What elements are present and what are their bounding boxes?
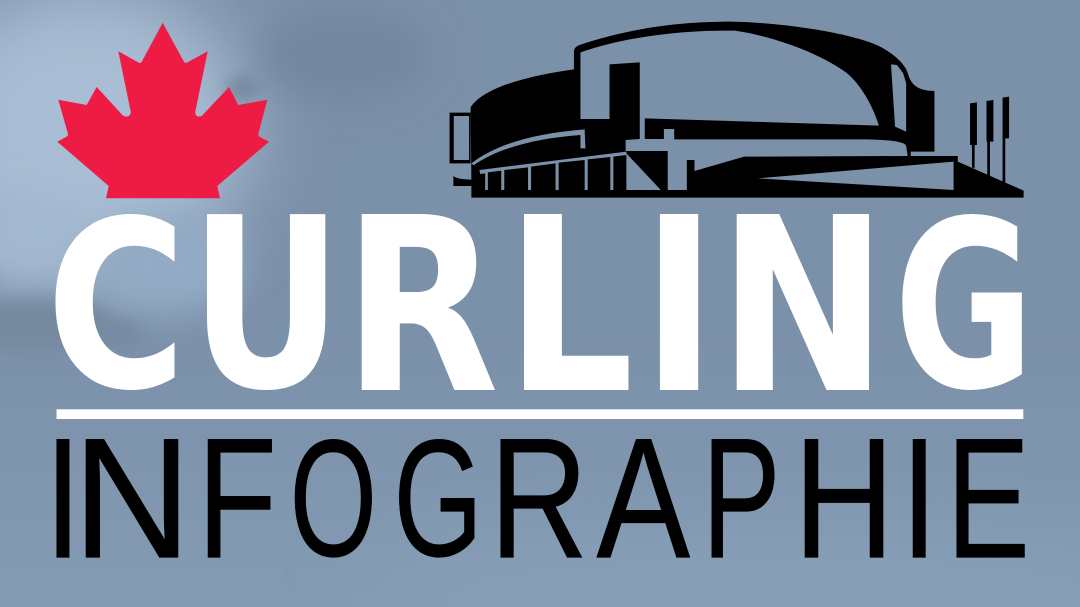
icon: red maple leaf — [57, 23, 269, 198]
subheading: INFOGRAPHIE: F — [197, 403, 277, 594]
subheading: INFOGRAPHIE: E — [946, 402, 1030, 594]
subheading: INFOGRAPHIE: I — [901, 402, 938, 594]
icon: black arena building — [450, 22, 1024, 198]
white divider bar — [56, 409, 1023, 419]
heading: CURLING: C — [46, 172, 187, 442]
subheading: INFOGRAPHIE: H — [794, 403, 894, 595]
subheading: INFOGRAPHIE: R — [490, 402, 588, 594]
subheading: INFOGRAPHIE: G — [394, 405, 483, 592]
heading: CURLING: N — [718, 166, 888, 447]
heading: CURLING: U — [190, 168, 343, 443]
subheading: INFOGRAPHIE: A — [596, 403, 691, 594]
heading: CURLING — [46, 166, 1034, 448]
heading: CURLING: I — [641, 166, 717, 447]
arena main body — [453, 22, 1024, 198]
subheading: INFOGRAPHIE: P — [702, 403, 780, 595]
flag poles — [970, 97, 1009, 184]
subheading: INFOGRAPHIE — [44, 402, 1030, 595]
subheading: INFOGRAPHIE: O — [290, 406, 377, 592]
subheading: INFOGRAPHIE: N — [72, 402, 191, 594]
heading: CURLING: R — [343, 166, 499, 447]
arena left frame — [450, 113, 471, 163]
heading: CURLING: G — [894, 171, 1034, 442]
subheading: INFOGRAPHIE: I — [44, 402, 82, 594]
heading: CURLING: L — [506, 167, 634, 448]
